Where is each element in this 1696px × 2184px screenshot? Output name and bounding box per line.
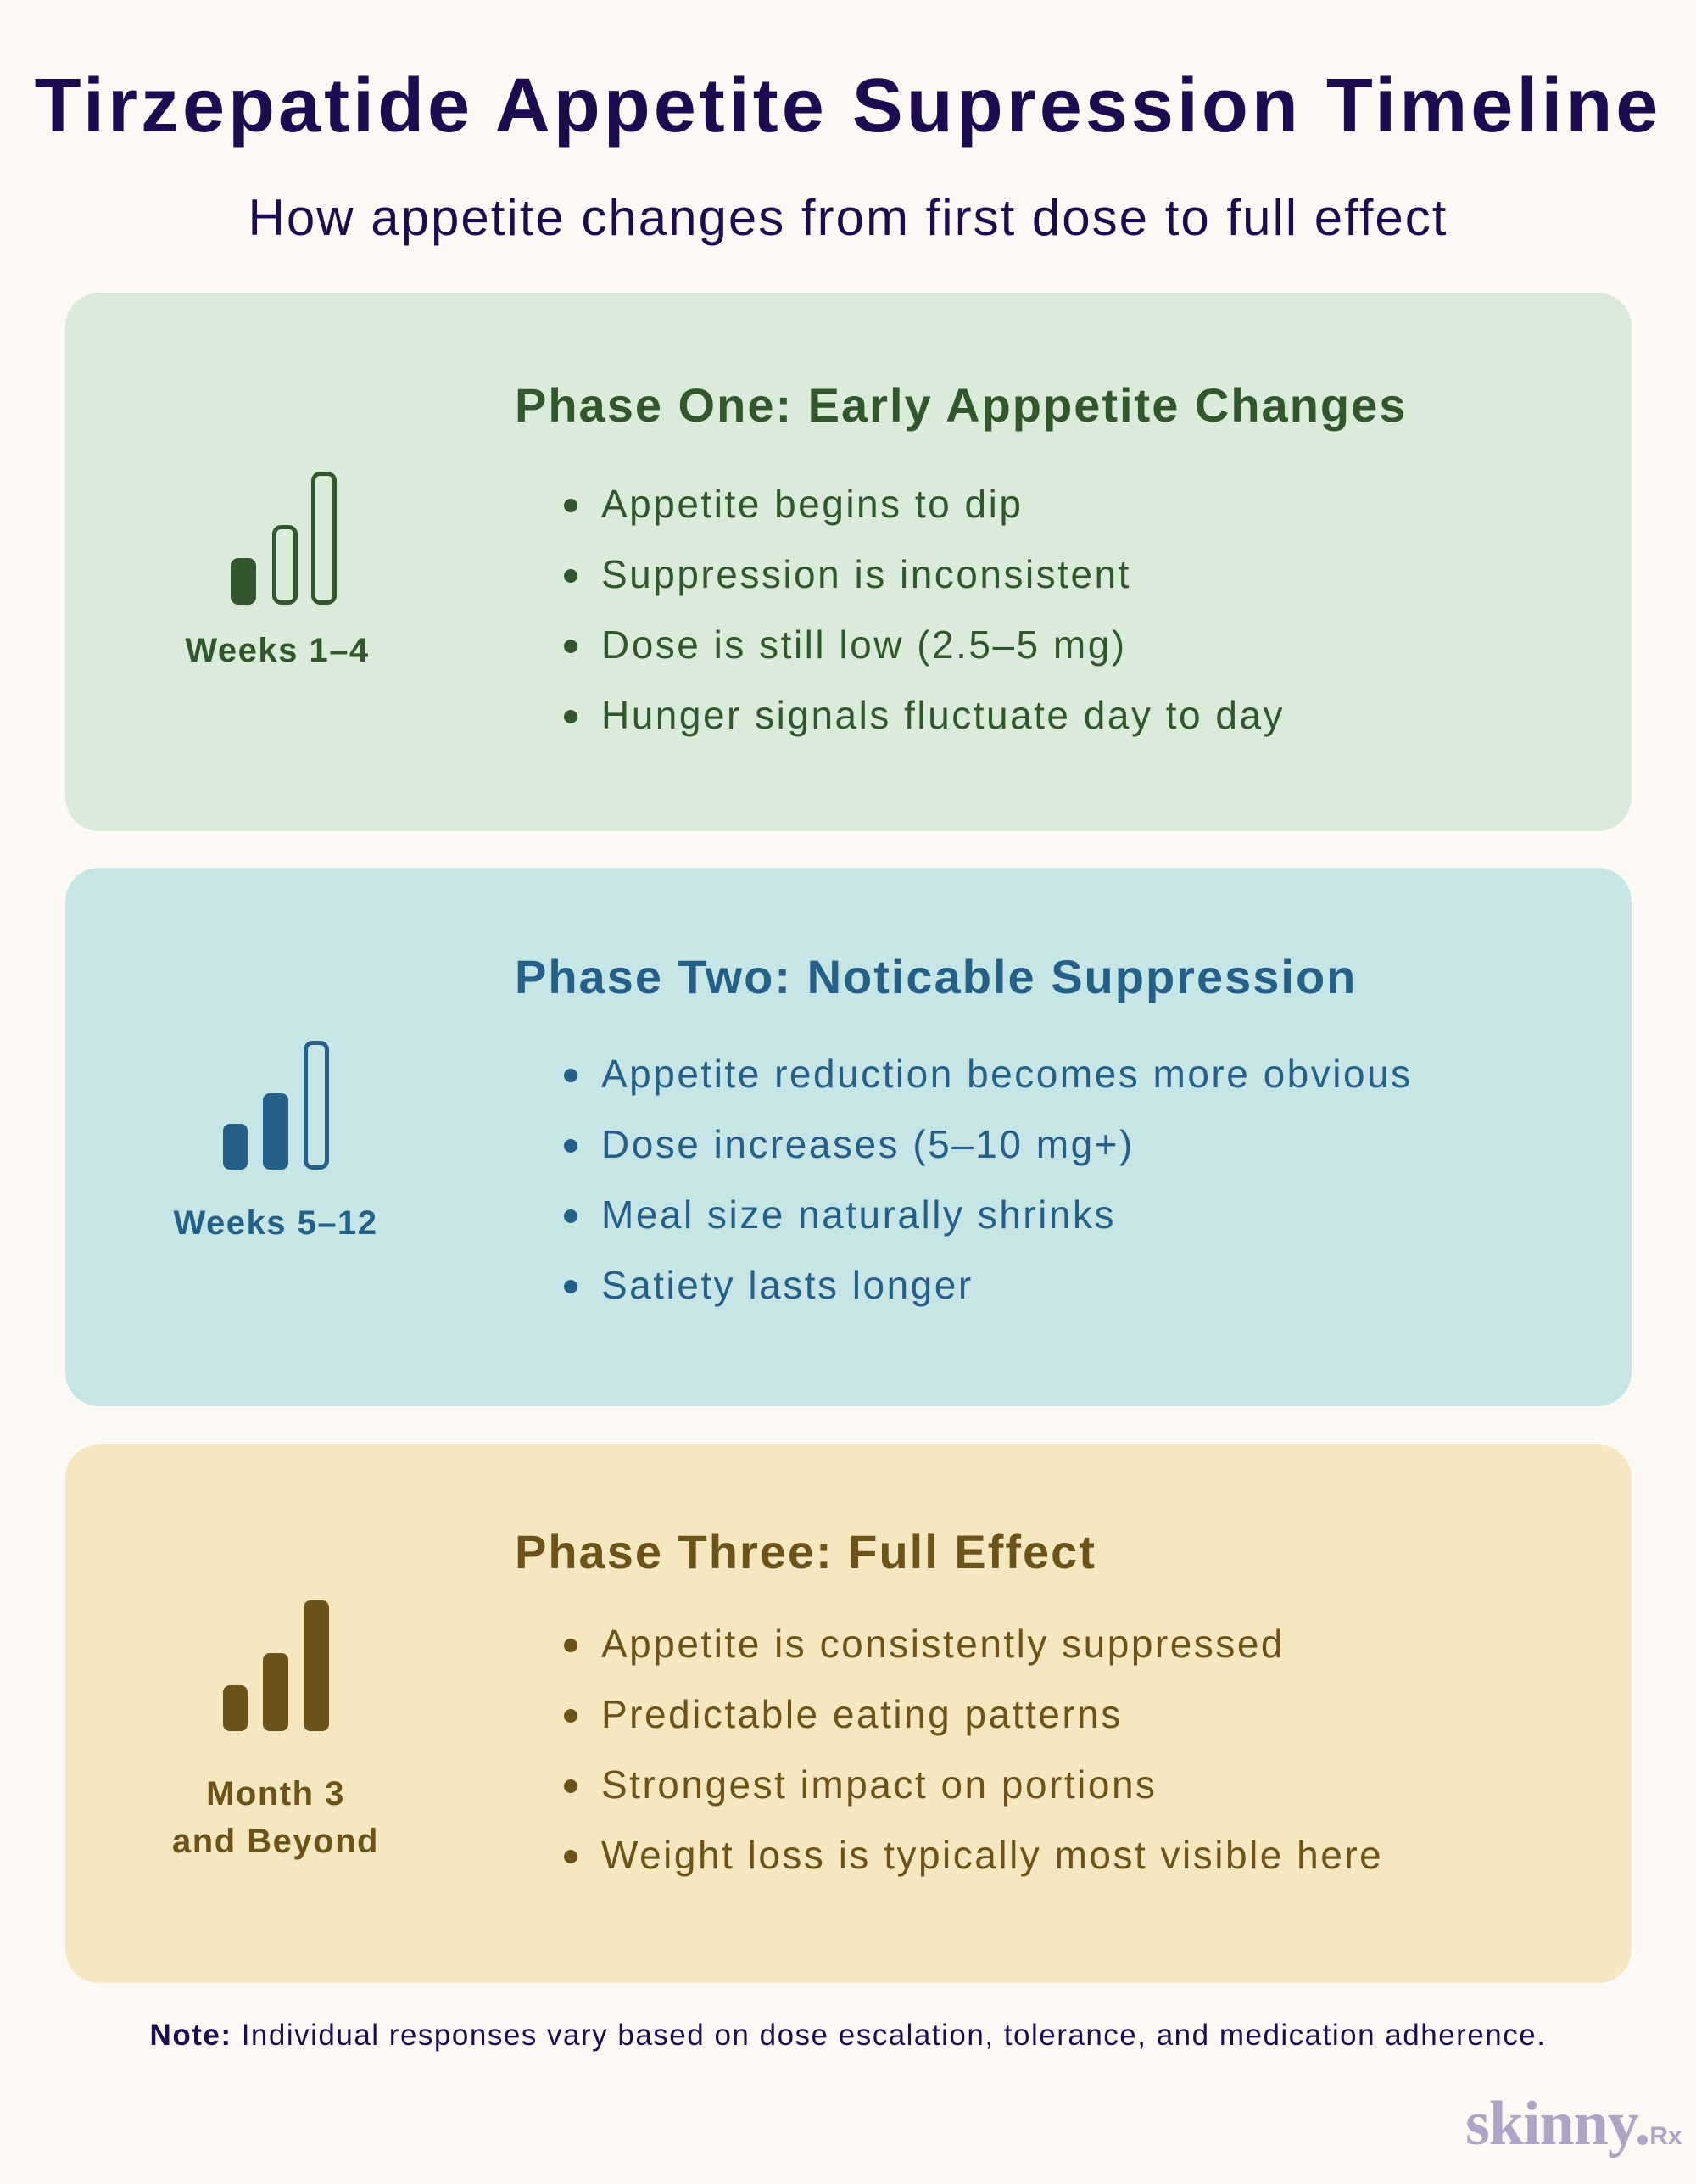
heading: phase three: Phase Three: Full Effect <box>515 1525 1096 1578</box>
panel: phase three <box>65 1444 1632 1983</box>
bullet list: phase one: Dose is still low (2.5–5 mg) <box>601 623 1127 667</box>
panel: phase one <box>65 293 1632 831</box>
bullet list: phase two: Meal size naturally shrinks <box>601 1193 1116 1237</box>
bullet list: phase one: Hunger signals fluctuate day to day <box>601 693 1285 737</box>
label: month 3 and beyond: Month 3 <box>206 1775 345 1813</box>
bullet list: phase three: Predictable eating patterns <box>601 1692 1123 1736</box>
bullet list: phase two: Appetite reduction becomes more obvious <box>601 1052 1413 1096</box>
icon: phase two bars <box>223 1041 329 1170</box>
bullet list: phase one <box>564 482 1285 737</box>
bullet list: phase two: Dose increases (5–10 mg+) <box>601 1122 1135 1166</box>
subtitle: How appetite changes from first dose to full effect <box>248 189 1448 246</box>
bullet list: phase two <box>564 1052 1413 1307</box>
icon: phase three bars <box>223 1600 329 1731</box>
note: Note: Individual responses vary based on dose escalation, tolerance, and medication adherence. <box>150 2019 1546 2052</box>
bullet list: phase three: Strongest impact on portions <box>601 1762 1158 1807</box>
bullet list: phase three <box>564 1622 1383 1877</box>
icon: phase one bars <box>231 472 337 605</box>
label: month 3 and beyond <box>172 1775 379 1860</box>
heading: phase two: Phase Two: Noticable Suppression <box>515 950 1357 1003</box>
bullet list: phase three: Weight loss is typically most visible here <box>601 1833 1383 1877</box>
title: Tirzepatide Appetite Supression Timeline <box>35 64 1661 148</box>
label: weeks 1-4: Weeks 1–4 <box>185 632 370 669</box>
heading: phase one: Phase One: Early Apppetite Changes <box>515 378 1407 432</box>
label: weeks 5-12: Weeks 5–12 <box>173 1204 378 1242</box>
bullet list: phase one: Suppression is inconsistent <box>601 552 1131 596</box>
bullet list: phase one: Appetite begins to dip <box>601 482 1023 526</box>
panel: phase two <box>65 868 1632 1406</box>
logo: skinny rx: skinny.Rx <box>1465 2089 1682 2159</box>
label: month 3 and beyond: and Beyond <box>172 1823 379 1860</box>
bullet list: phase three: Appetite is consistently suppressed <box>601 1622 1285 1666</box>
bullet list: phase two: Satiety lasts longer <box>601 1263 974 1307</box>
